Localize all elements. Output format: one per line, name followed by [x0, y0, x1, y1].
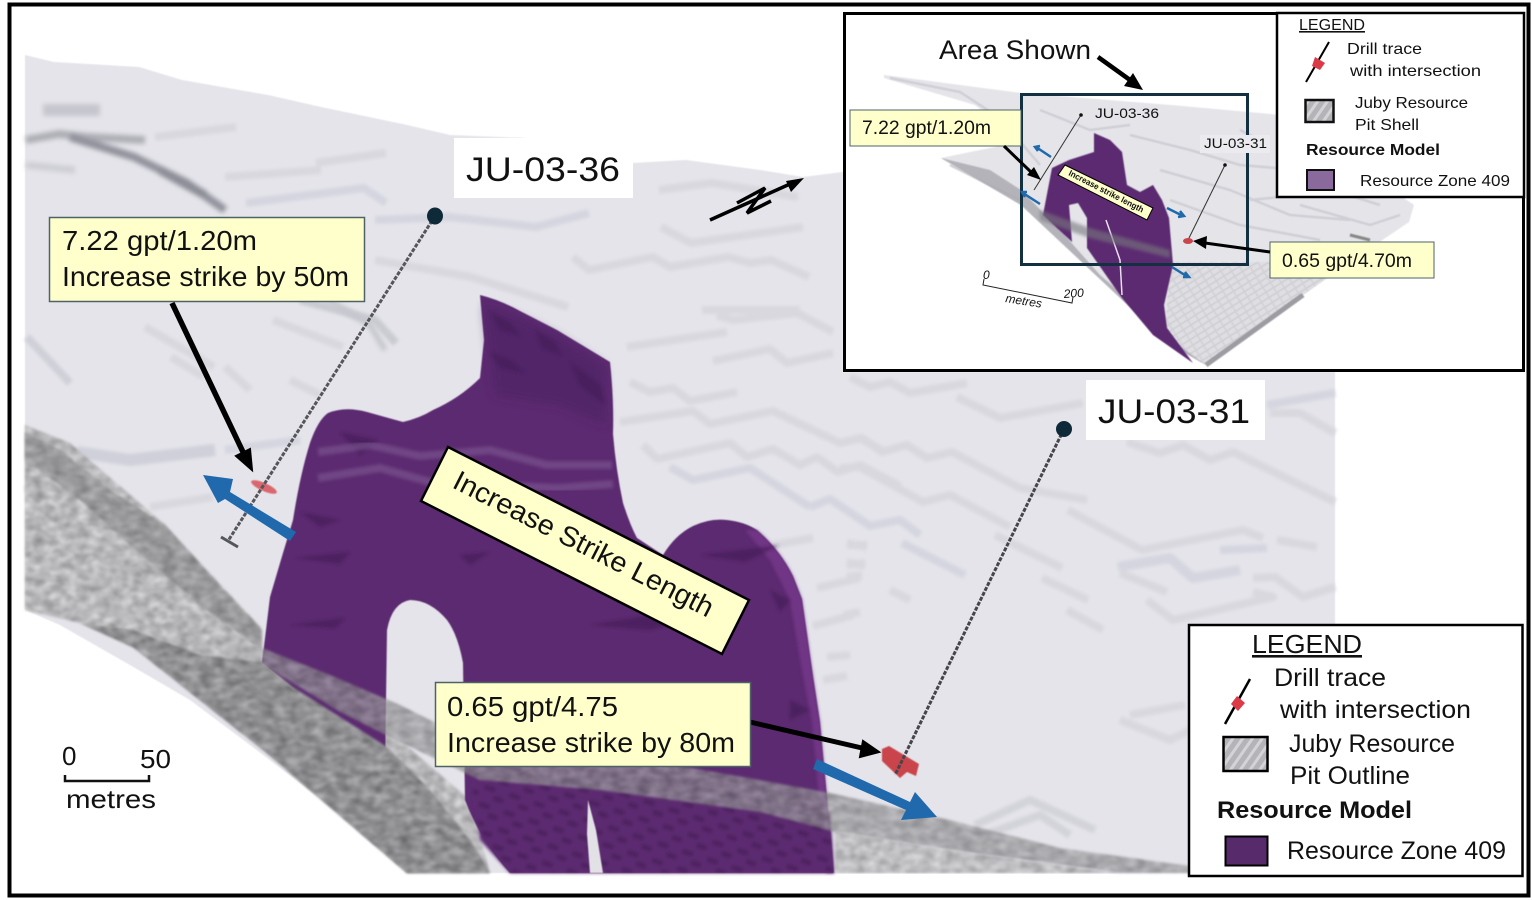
legend main: Juby Resource	[1289, 730, 1455, 758]
inset scale bar: metres	[1005, 291, 1043, 311]
inset crest band	[1040, 210, 1170, 258]
label JU-03-36	[454, 138, 633, 198]
zone lit edge	[745, 530, 834, 873]
inset legend	[1277, 13, 1524, 197]
zone dark facets	[290, 312, 810, 815]
inset scale bar: 200	[1062, 286, 1085, 301]
legend main: Pit Outline	[1290, 762, 1410, 790]
resource zone 409 solid	[262, 295, 834, 873]
inset scale bar: 0	[983, 268, 990, 282]
inset legend: Resource Zone 409	[1360, 173, 1510, 190]
inset legend: Drill trace	[1347, 41, 1422, 58]
arrow to intersection JU-03-31	[750, 722, 879, 757]
label JU-03-31: JU-03-31	[1098, 393, 1250, 431]
inset white label background	[1200, 135, 1270, 153]
callout JU-03-31 grade: 0.65 gpt/4.75	[447, 691, 618, 722]
drill hole JU-03-31	[882, 421, 1072, 778]
white sliver in zone	[587, 800, 603, 873]
inset legend: Juby Resource	[1355, 95, 1468, 112]
pit crest band crossing zone	[262, 648, 1190, 873]
trace	[228, 216, 435, 541]
main 3D resource model view	[25, 55, 1335, 873]
label JU-03-36: JU-03-36	[466, 151, 620, 189]
icon: drill trace	[1225, 679, 1250, 724]
scale bar main	[62, 741, 171, 814]
callout increase strike length: Increase Strike Length	[448, 465, 719, 623]
trace	[895, 429, 1064, 775]
blue arrow east	[813, 759, 937, 820]
inset legend: with intersection	[1349, 63, 1481, 80]
inset key map	[844, 13, 1524, 370]
scale bar main: metres	[66, 784, 156, 814]
arrow to intersection JU-03-36	[172, 303, 252, 470]
callout increase strike length	[421, 447, 749, 654]
callout JU-03-31 grade: Increase strike by 80m	[447, 727, 735, 758]
icon: zone swatch	[1226, 836, 1268, 866]
pit wall lower left band	[80, 623, 490, 873]
legend main: Resource Zone 409	[1287, 837, 1506, 865]
area shown label: Area Shown	[939, 35, 1091, 65]
pit wall crest shadow	[25, 432, 262, 650]
callout JU-03-36 grade	[50, 218, 364, 302]
area shown arrow	[1098, 57, 1143, 90]
inset label JU-03-31: JU-03-31	[1204, 135, 1267, 151]
icon: inset pit swatch	[1306, 100, 1334, 122]
pit wall light band	[25, 425, 490, 873]
inset area rectangle	[1022, 94, 1248, 264]
scale bar main: 50	[140, 744, 171, 774]
collar	[427, 208, 443, 224]
inset pit surface	[884, 75, 1414, 365]
inset callout left: 7.22 gpt/1.20m	[862, 118, 991, 139]
inset pit left band	[941, 158, 1206, 365]
legend main: LEGEND	[1252, 629, 1362, 659]
label JU-03-31	[1086, 380, 1265, 440]
north arrow	[710, 178, 804, 220]
icon: pit swatch	[1224, 737, 1268, 771]
inset legend: Pit Shell	[1355, 117, 1419, 134]
legend main: Drill trace	[1274, 664, 1386, 692]
inset bench steps	[890, 78, 1400, 255]
inset callout strike length: Increase strike length	[1067, 168, 1146, 214]
inset pit wall	[1165, 262, 1340, 365]
inset callout right: 0.65 gpt/4.70m	[1282, 251, 1412, 272]
intersection	[882, 746, 919, 778]
inset label JU-03-36: JU-03-36	[1095, 105, 1159, 121]
inset callout right	[1270, 242, 1434, 278]
inset drill holes	[1034, 113, 1227, 244]
zone body	[262, 295, 834, 873]
inset legend: LEGEND	[1299, 17, 1365, 34]
inset scale bar	[983, 268, 1085, 311]
drill hole JU-03-36	[221, 208, 443, 547]
legend main: with intersection	[1279, 696, 1471, 724]
pit shell surface	[25, 55, 1335, 873]
inset callout left	[850, 110, 1021, 146]
icon: inset drill trace	[1306, 42, 1329, 82]
legend main	[1189, 625, 1522, 876]
callout JU-03-36 grade: 7.22 gpt/1.20m	[62, 225, 257, 256]
zone shaded upper lobe	[484, 305, 606, 425]
inset blue arrows	[1022, 146, 1189, 277]
inset arrow left callout	[1004, 146, 1041, 180]
pit surface lower right	[835, 830, 1120, 873]
end of hole tick	[221, 537, 238, 547]
blue arrow west	[203, 475, 296, 541]
surface bench steps	[25, 127, 1335, 835]
intersection	[250, 478, 278, 496]
callout JU-03-31 grade	[436, 682, 750, 766]
dark bench streak top left	[26, 110, 385, 350]
inset legend: Resource Model	[1306, 142, 1440, 159]
collar	[1056, 421, 1072, 437]
inset pit right edge	[1206, 295, 1303, 365]
zone pale bench overlay	[318, 445, 613, 488]
inset background	[844, 14, 1524, 370]
icon: inset zone swatch	[1307, 170, 1334, 190]
zone lower woven facets	[470, 770, 834, 873]
scale bar main: 0	[62, 741, 76, 771]
legend main: Resource Model	[1217, 797, 1412, 824]
inset arrow right callout	[1193, 236, 1270, 252]
inset zone	[1043, 133, 1193, 363]
callout JU-03-36 grade: Increase strike by 50m	[62, 261, 349, 292]
inset zone sliver	[1106, 220, 1122, 295]
